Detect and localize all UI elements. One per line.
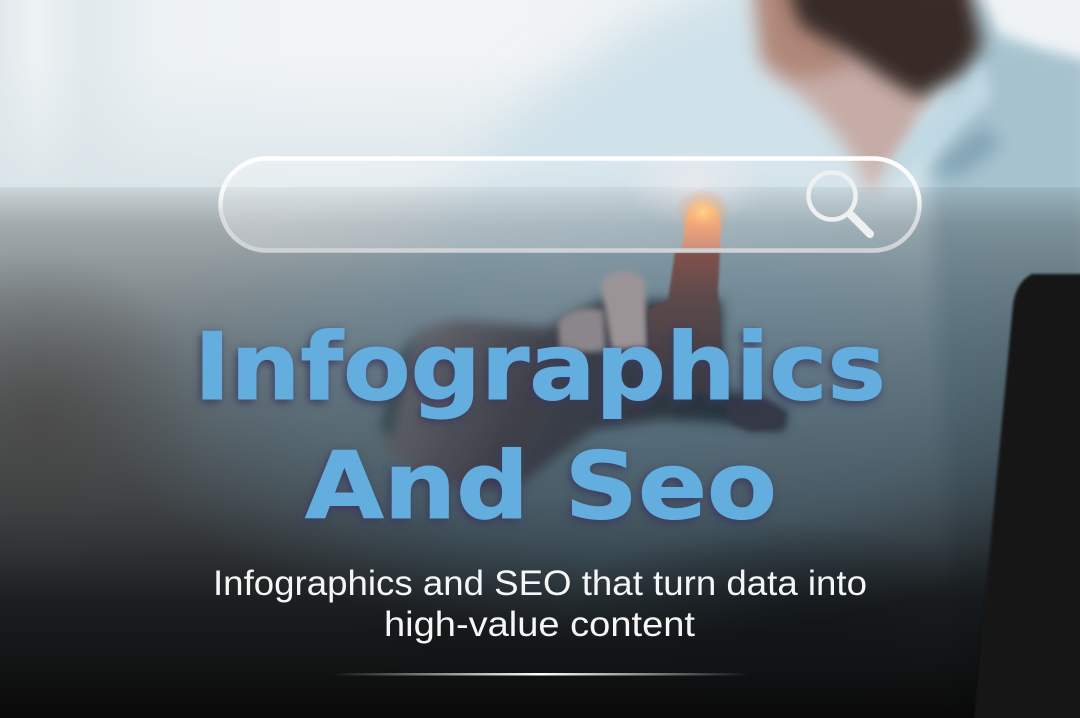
finger glow [675, 188, 731, 236]
title line 1: Infographics [194, 313, 886, 421]
neck [752, 0, 930, 195]
title line 2: And Seo [305, 432, 777, 540]
title [194, 313, 886, 540]
finger haze [625, 143, 765, 227]
shirt cuff [380, 335, 417, 440]
arm highlight [440, 250, 640, 340]
subtitle line 2: high-value content [384, 605, 695, 644]
lower dark fold [570, 520, 1010, 700]
finger shaft [648, 252, 722, 395]
icon: magnifying glass [808, 172, 870, 234]
thumb tip [725, 400, 787, 432]
search bar outline [220, 158, 920, 250]
fingertip [682, 204, 721, 250]
blue tint over shirt [100, 160, 1080, 640]
background corner top right [978, 0, 1080, 60]
beard [785, 0, 982, 98]
search bar glass fill [220, 158, 920, 250]
warm grey left vignette [0, 250, 210, 590]
knuckles [558, 270, 647, 352]
divider line [332, 673, 749, 676]
right shoulder [930, 0, 1080, 718]
hand and pointing finger [380, 188, 787, 490]
palm and wrist [383, 300, 787, 490]
subtitle line 1: Infographics and SEO that turn data into [213, 564, 867, 603]
collar shadow [925, 125, 1000, 175]
subtitle [213, 564, 867, 644]
dark gradient overlay [0, 187, 1080, 718]
collar [880, 62, 992, 188]
shirt body [380, 0, 1080, 718]
laptop corner [973, 274, 1080, 718]
